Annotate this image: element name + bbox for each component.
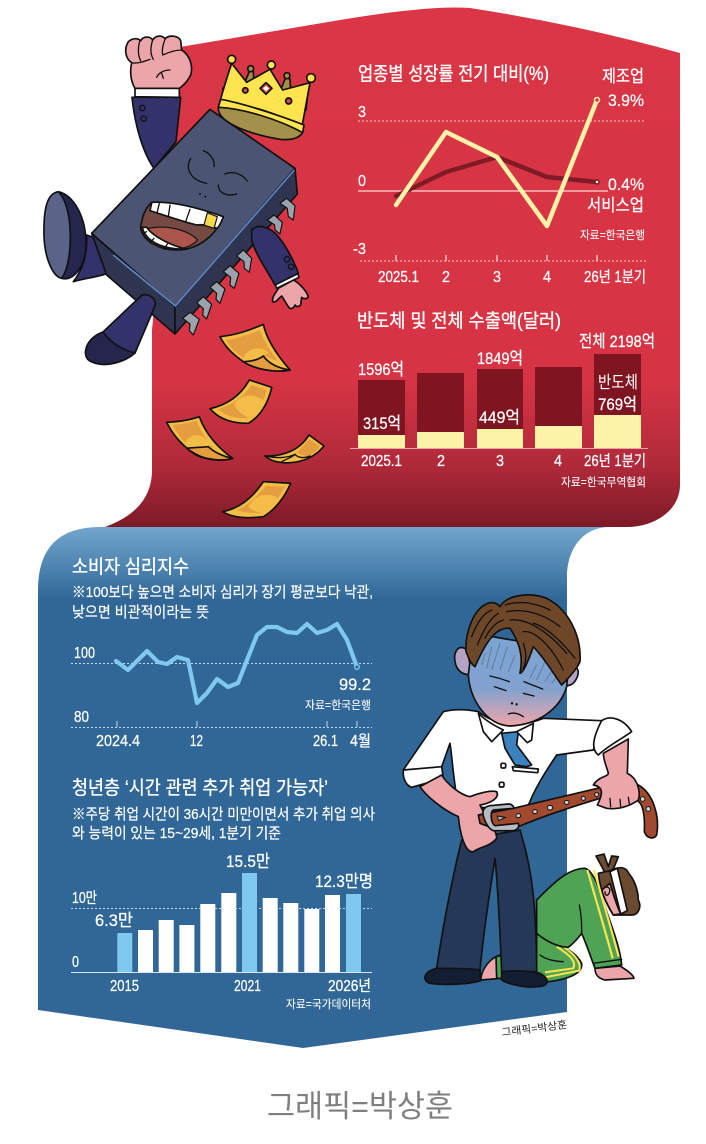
label: manufacturing value: 제조업 [602, 67, 644, 86]
note: sentiment definition [72, 584, 373, 621]
value labels: 769억 [598, 395, 637, 414]
illustration: falling money notes [167, 324, 324, 518]
value labels: 6.3만 [95, 911, 133, 930]
axis labels: 26.1 [313, 733, 338, 750]
value labels: 1849억 [477, 349, 523, 368]
source: national data agency: 자료=국가데이터처 [286, 998, 371, 1011]
axis labels: 3 [496, 453, 504, 470]
sub: chip face [141, 151, 247, 250]
credit: graphic byline: 그래픽=박상훈 [267, 1089, 453, 1124]
sub: shirt [403, 710, 632, 810]
bars: semiconductor exports [358, 415, 641, 448]
series: manufacturing [396, 98, 600, 226]
label: services value [587, 175, 644, 215]
label: services value: 서비스업 [587, 196, 644, 215]
axis labels: 4 [554, 453, 562, 470]
note: sentiment definition: ※100보다 높으면 소비자 심리가 장기 평균보다 낙관, [72, 584, 373, 601]
sub: crown [218, 55, 315, 140]
heading: exports: 반도체 및 전체 수출액(달러) [357, 310, 561, 332]
heading: consumer sentiment: 소비자 심리지수 [72, 556, 189, 578]
line chart: growth rate by sector [353, 63, 648, 286]
value labels: 15.5만 [226, 852, 270, 871]
axis labels: 2025.1 [361, 453, 402, 470]
heading: growth rate: 업종별 성장률 전기 대비(%) [358, 63, 549, 85]
sub: left arm and hand [420, 775, 497, 852]
note: definition [72, 806, 375, 842]
panel: blue youth background [38, 527, 610, 1048]
sub: head and hair [455, 595, 580, 726]
value labels: 315억 [363, 414, 401, 433]
axis labels: 2026년 [328, 977, 371, 995]
value labels: 449억 [479, 408, 520, 427]
label: services value: 0.4% [608, 175, 644, 194]
axis labels [96, 732, 371, 750]
note: definition: 와 능력이 있는 15~29세, 1분기 기준 [72, 825, 281, 842]
axis labels: 2025.1 [378, 269, 419, 286]
bar chart: youth underemployment [71, 777, 375, 1011]
illustration: chip character lower leg and shoe [85, 295, 155, 364]
axis labels [110, 977, 371, 995]
line chart: consumer sentiment: 80 [74, 709, 89, 726]
illustration: man tightening belt and crouching youth [403, 595, 658, 987]
label: manufacturing value: 3.9% [608, 91, 644, 110]
series: services [396, 157, 599, 196]
axis labels: 2015 [110, 978, 139, 995]
value labels [72, 852, 373, 971]
sub: note 4 [265, 435, 324, 463]
axis labels [361, 452, 646, 470]
source: bank of korea: 자료=한국은행 [580, 229, 645, 242]
line chart: growth rate by sector: -3 [353, 241, 366, 258]
illustration: semiconductor chip character [44, 36, 315, 335]
value labels: 반도체 [598, 373, 638, 392]
sub: crouching youth [481, 854, 640, 982]
note: sentiment definition: 낮으면 비관적이라는 뜻 [72, 604, 209, 621]
axis labels: 4월 [350, 732, 371, 750]
axis labels: 3 [493, 269, 501, 286]
sub: trousers and shoes [425, 830, 547, 987]
panel: red economy background [105, 8, 680, 527]
series: sentiment index [116, 624, 359, 703]
value labels [358, 332, 655, 433]
axis labels: 26년 1분기 [584, 452, 646, 470]
sub: note 5 [223, 482, 291, 518]
value labels: 전체 2198억 [579, 332, 655, 351]
value labels: 1596억 [358, 360, 404, 379]
line chart: growth rate by sector: 0 [358, 173, 366, 190]
sub: belt and buckle [478, 785, 658, 838]
value labels: 10만 [72, 889, 97, 907]
axis labels: 12 [190, 733, 203, 750]
sub: right arm and hand [593, 739, 639, 809]
sub: chip pins [183, 198, 295, 335]
sub: note 3 [167, 417, 233, 460]
axis labels: 26년 1분기 [584, 268, 646, 286]
axis labels: 4 [543, 269, 551, 286]
bars: total exports [358, 354, 641, 448]
sub: lowered arm and hand [252, 227, 308, 308]
axis labels: 2 [437, 453, 445, 470]
bar chart: exports [350, 310, 655, 489]
heading: youth underemployment: 청년층 ‘시간 관련 추가 취업 가능자’ [72, 777, 328, 799]
source: trade association: 자료=한국무역협회 [561, 476, 646, 489]
sub: note 1 [220, 324, 290, 371]
sub: raised arm and fist [126, 36, 192, 168]
axis labels: 2024.4 [96, 733, 140, 750]
axis labels: 2021 [234, 978, 261, 995]
line chart: consumer sentiment [71, 556, 373, 750]
axis labels: 2 [442, 269, 450, 286]
source: bank of korea: 자료=한국은행 [305, 699, 371, 712]
note: definition: ※주당 취업 시간이 36시간 미만이면서 추가 취업 의사 [72, 806, 375, 823]
label: manufacturing value [602, 67, 644, 110]
sub: note 2 [210, 380, 272, 423]
value labels: 12.3만명 [315, 872, 373, 891]
axis labels [378, 268, 646, 286]
line chart: growth rate by sector: 3 [358, 104, 366, 121]
label: latest value: 99.2 [339, 675, 371, 694]
line chart: consumer sentiment: 100 [74, 645, 95, 662]
sub: left leg and shoe [44, 192, 117, 282]
bars: yearly values [117, 873, 361, 972]
credit: small illustrator credit: 그래픽=박상훈 [501, 1018, 568, 1039]
sub: chip body [92, 109, 297, 334]
value labels: 0 [72, 954, 79, 971]
